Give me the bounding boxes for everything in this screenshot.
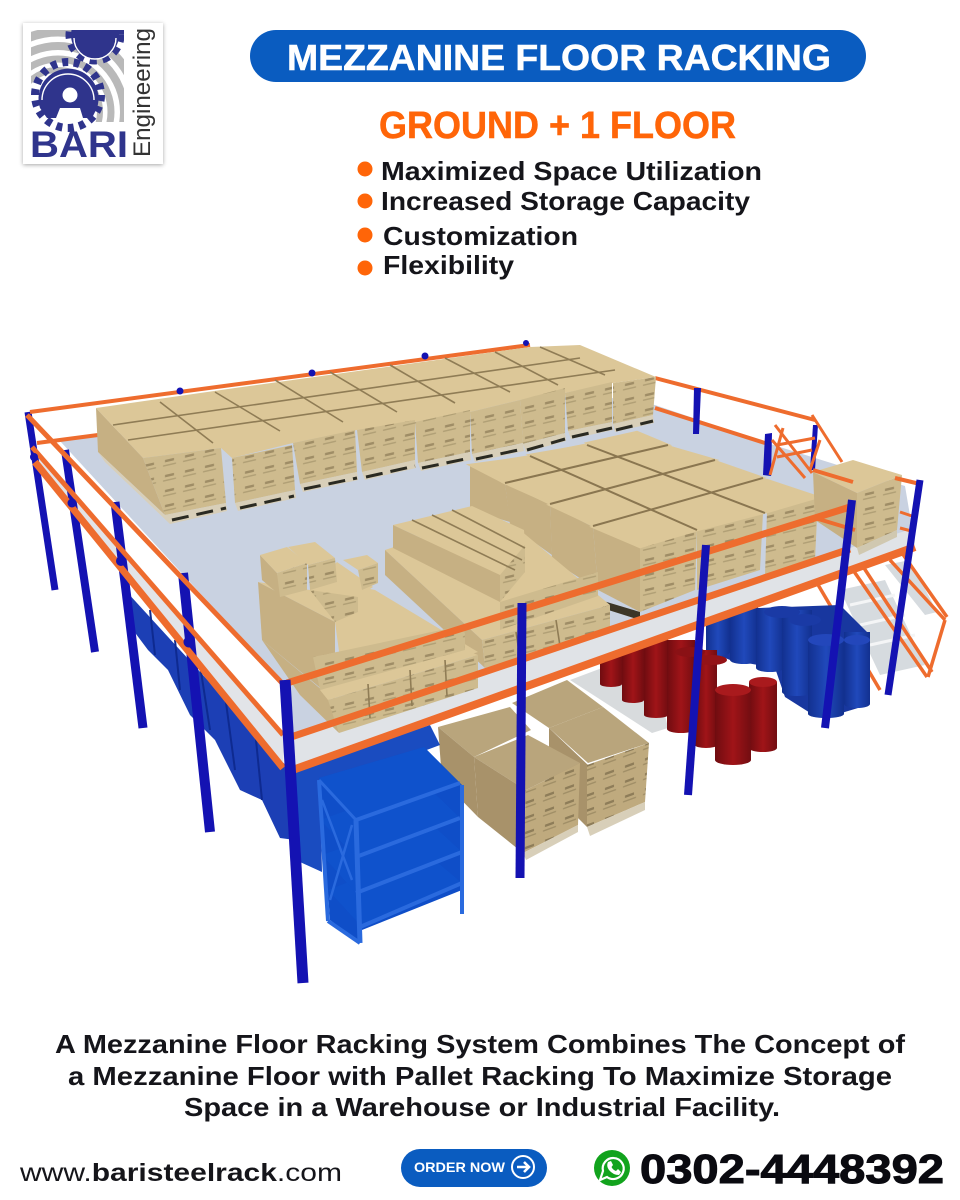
benefits list: Flexibility [383, 250, 515, 280]
logo: Bari Engineering: BARI [30, 124, 128, 165]
subtitle: ground + 1 floor: GROUND + 1 FLOOR [379, 105, 736, 147]
back and right railings [30, 345, 815, 443]
benefits list: Customization [383, 221, 578, 251]
phone number: 0302-4448392 [640, 1146, 944, 1192]
under-floor blue rack run [125, 590, 440, 872]
floor deck [33, 380, 915, 772]
ground-level pallets [438, 680, 649, 860]
left columns [28, 412, 210, 832]
ground shadow [570, 650, 668, 733]
order now button: ORDER NOW [414, 1160, 505, 1175]
icon: whatsapp [594, 1150, 630, 1186]
website url: www. baristeelrack .com [19, 1159, 342, 1187]
blue barrels [706, 600, 870, 718]
stairs [817, 553, 947, 690]
front-left stack of small cartons [258, 542, 478, 733]
back rail posts [176, 340, 818, 476]
illustration: mezzanine floor with racking [27, 340, 947, 983]
left rail joints [30, 453, 194, 648]
lone pallet by the stairs [813, 460, 902, 555]
right block of large pallets [470, 432, 818, 620]
upper stair gate [770, 415, 842, 478]
logo: Bari Engineering [20, 21, 166, 168]
description paragraph: A Mezzanine Floor Racking System Combines The Concept of [55, 1029, 905, 1059]
description paragraph: Space in a Warehouse or Industrial Facility. [184, 1092, 780, 1122]
title banner [250, 30, 866, 82]
front railings [27, 415, 920, 768]
benefits list: Increased Storage Capacity [381, 186, 751, 216]
blue storage shelf [319, 747, 462, 943]
benefits list [358, 156, 762, 280]
red barrels [600, 635, 777, 765]
benefits list: Maximized Space Utilization [381, 156, 762, 186]
back row of pallets [96, 345, 656, 524]
title banner: MEZZANINE FLOOR RACKING [287, 37, 831, 78]
logo: Bari Engineering: Engineering [129, 28, 156, 157]
description paragraph: a Mezzanine Floor with Pallet Racking To Maximize Storage [68, 1061, 892, 1091]
description paragraph [55, 1029, 905, 1122]
centre stack of long cartons [385, 506, 610, 668]
order now button [401, 1149, 547, 1187]
front columns [285, 480, 920, 983]
